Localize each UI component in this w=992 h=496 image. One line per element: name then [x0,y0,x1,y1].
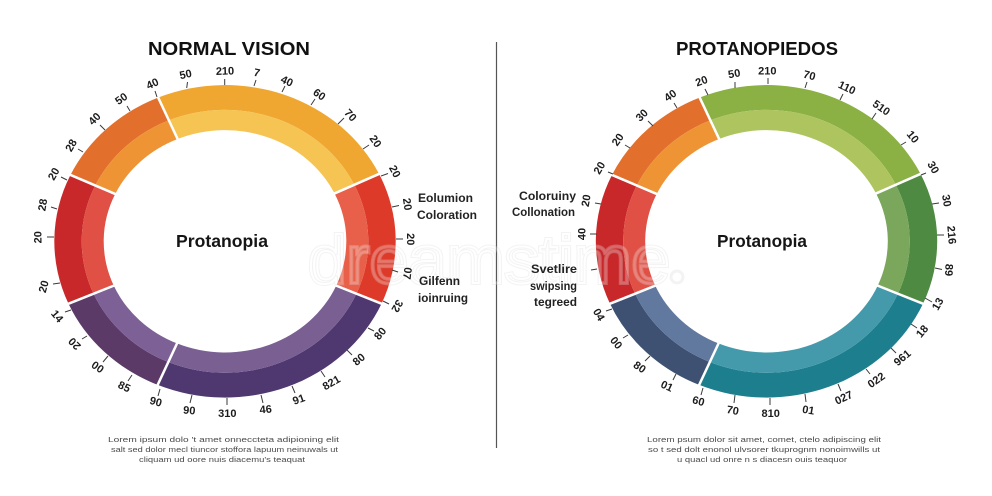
scale ticks: normal vision [47,79,403,405]
watermark: dreamstime [308,222,670,298]
scale labels: normal vision: 210 [216,65,234,78]
side label: svetlire swipsing tegreed: swipsing [530,281,577,293]
segment: right red [334,174,396,304]
scale labels: protanopia: 18 [914,323,931,340]
scale labels: protanopia [576,66,958,420]
scale labels: normal vision: 70 [341,107,359,124]
scale labels: protanopia: 510 [870,98,892,118]
scale labels: normal vision: 20 [400,197,413,211]
scale labels: normal vision: 20 [367,133,383,150]
caption: normal vision [108,435,340,464]
side label: svetlire swipsing tegreed: Svetlire [531,264,577,276]
scale labels: protanopia: 20 [610,132,627,148]
scale labels: normal vision: 90 [148,395,163,410]
scale labels: normal vision: 20 [404,233,416,245]
scale labels: normal vision: 40 [279,74,295,90]
scale labels: normal vision: 85 [116,379,132,395]
scale labels: normal vision: 28 [36,198,50,212]
scale labels: normal vision [32,65,416,420]
scale labels: normal vision: 28 [63,137,80,154]
segment: orange [70,98,178,194]
side label: svetlire swipsing tegreed [530,264,577,309]
caption: normal vision: Lorem ipsum dolo 't amet onnecctetа adipiоning elit [108,435,340,444]
scale labels: normal vision: 20 [32,231,44,243]
side label: eolumion coloration [417,193,477,222]
scale labels: normal vision: 60 [311,87,327,103]
scale ticks: protanopia [590,78,944,405]
side label: gilfenn ioinruing [418,276,468,305]
segment: yellow [158,85,379,193]
segment: teal [699,286,923,398]
scale labels: normal vision: 20 [66,335,84,352]
watermark: dreamstime [308,222,670,298]
scale labels: normal vision: 80 [351,351,368,369]
scale labels: protanopia: 00 [607,335,624,352]
scale labels: protanopia: 13 [930,296,947,313]
scale labels: protanopia: 01 [659,379,675,395]
side label: gilfenn ioinruing: Gilfenn [419,276,460,288]
caption: protanopia: so t sed dolt enonol ulvsorer tkuprognm nonoimwills ut [648,445,881,454]
scale labels: normal vision: 50 [113,91,130,108]
scale labels: protanopia: 027 [833,389,855,408]
side label: eolumion coloration: Coloration [417,210,477,222]
scale labels: protanopia: 40 [662,88,679,104]
scale labels: normal vision: 20 [46,166,63,183]
scale labels: normal vision: 07 [400,266,413,280]
scale labels: protanopia: 20 [580,194,594,208]
segment: light green [700,85,921,193]
scale labels: normal vision: 46 [259,403,272,417]
scale labels: normal vision: 00 [89,359,106,376]
side label: coloruiny collonation: Collonation [512,207,575,219]
scale labels: protanopia: 01 [801,404,815,418]
side label: coloruiny collonation [512,191,577,219]
side label: eolumion coloration: Eolumion [418,193,473,205]
scale labels: protanopia: 30 [924,159,941,176]
side label: coloruiny collonation: Coloruiny [519,191,577,203]
scale labels: normal vision: 80 [372,325,389,343]
scale labels: protanopia: 70 [802,69,817,83]
scale labels: protanopia: 80 [631,359,648,376]
scale labels: protanopia: 40 [576,228,588,240]
scale labels: protanopia: 70 [726,404,740,418]
scale labels: normal vision: 32 [388,297,405,314]
scale labels: protanopia: 30 [939,194,953,208]
scale labels: protanopia: 04 [590,307,607,324]
scale labels: protanopia: 60 [691,394,706,409]
title: normal vision: NORMAL VISION [148,38,310,59]
caption: normal vision: salt sed dolor mecl tiuncor stoffora lapuum neinuwals ut [111,445,339,454]
scale labels: normal vision: 40 [145,76,161,92]
scale labels: protanopia: 810 [762,408,780,420]
center divider [496,42,498,448]
scale labels: protanopia: 210 [758,66,776,78]
center label: normal vision ring: Protanopia [176,231,268,251]
scale labels: normal vision: 821 [321,374,343,393]
scale labels: protanopia: 022 [866,371,888,391]
segment: left red [596,175,657,304]
panel: protanopia ring [596,85,937,398]
scale labels: protanopia: 89 [942,264,955,276]
scale labels: protanopia: 110 [836,79,857,97]
scale labels: normal vision: 310 [218,408,236,420]
side label: svetlire swipsing tegreed: tegreed [534,297,577,309]
scale labels: normal vision: 7 [252,67,261,80]
caption: normal vision: cliquam ud oore nuis diacemu's teaquat [139,455,306,464]
caption: protanopia: u quacl ud onre n s diacesn ouis teaquor [677,455,848,464]
center label: protanopia ring: Protanopia [717,231,807,251]
caption: protanopia: Lorem psum dolor sit amet, comet, ctelo adipiscing elit [647,435,882,444]
scale labels: normal vision: 20 [386,163,402,180]
title: protanopiedos: PROTANOPIEDOS [676,38,838,59]
scale labels: normal vision: 90 [183,404,196,418]
scale labels: normal vision: 50 [178,68,193,82]
scale labels: protanopia: 216 [944,225,958,245]
segment: lower purple [157,286,382,398]
segment: dark green [876,174,937,304]
segment: left red [54,175,115,304]
scale labels: protanopia: 20 [694,74,710,89]
scale labels: normal vision: 14 [48,308,66,326]
segment: orange [612,98,719,194]
scale labels: protanopia: 961 [892,348,914,369]
scale labels: normal vision: 40 [86,111,104,128]
scale labels: protanopia: 30 [634,107,651,124]
scale labels: normal vision: 91 [291,392,307,408]
segment: lower-left plum [68,286,177,385]
scale labels: normal vision: 20 [37,279,52,294]
scale labels: protanopia: 20 [592,160,608,177]
scale labels: protanopia: 10 [904,129,921,146]
panel: normal vision ring [54,85,396,398]
segment: navy [610,286,718,385]
side label: gilfenn ioinruing: ioinruing [418,293,468,305]
scale labels: protanopia: 50 [727,67,741,81]
caption: protanopia [647,435,882,464]
